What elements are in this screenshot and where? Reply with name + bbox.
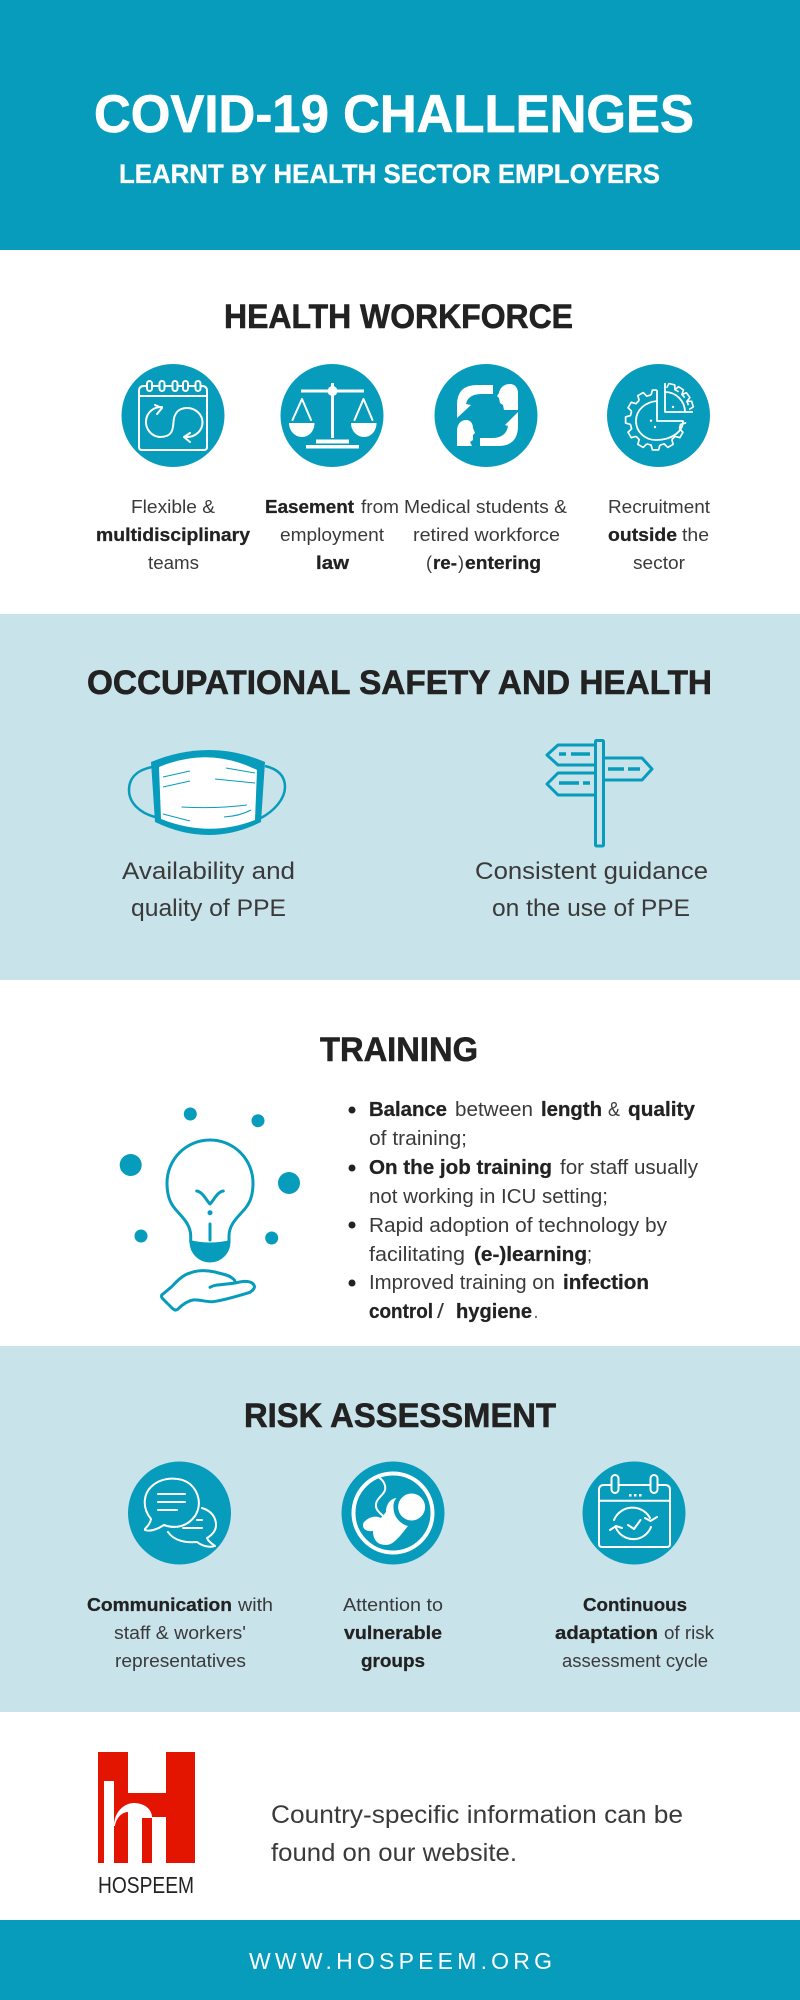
text: training bullet list: between <box>455 1099 533 1121</box>
text: medical students: re- <box>433 553 457 573</box>
text: easement: Easement <box>265 497 354 517</box>
text: training bullet list: not working in ICU setting; <box>369 1186 608 1208</box>
text: continuous adaptation: Continuous <box>583 1595 687 1615</box>
icon: face mask <box>129 750 285 835</box>
text: medical students <box>404 497 567 573</box>
text: recruitment: sector <box>633 553 685 573</box>
subtitle: LEARNT BY HEALTH SECTOR EMPLOYERS <box>119 159 660 189</box>
icon: recruitment gear and protractor <box>607 364 710 467</box>
text: flexible teams: multidisciplinary <box>96 525 250 545</box>
text: training bullet list: Balance <box>369 1099 447 1121</box>
icon: fetus in womb <box>342 1462 444 1564</box>
icon: assessment calendar <box>582 1462 686 1564</box>
text: recruitment: the <box>682 525 709 545</box>
text: medical students: ) <box>458 553 464 573</box>
text: flexible teams: teams <box>148 553 199 573</box>
text: consistent guidance: Consistent guidance <box>475 858 708 885</box>
text: easement: law <box>316 553 350 573</box>
text: training bullet list: & <box>608 1099 621 1121</box>
text: continuous adaptation <box>555 1595 715 1671</box>
text: communication: Communication <box>87 1595 232 1615</box>
panel: health workforce <box>0 250 800 614</box>
logo: HOSPEEM: HOSPEEM <box>98 1872 194 1898</box>
text: easement <box>265 497 399 573</box>
text: training bullet list: Improved training on <box>369 1272 555 1294</box>
text: recruitment <box>608 497 710 573</box>
text: flexible teams <box>96 497 250 573</box>
text: training bullet list: On the job training <box>369 1157 552 1179</box>
text: communication: representatives <box>115 1651 246 1671</box>
logo: HOSPEEM <box>98 1752 195 1898</box>
text: country-specific information: Country-specific information can be <box>271 1801 683 1829</box>
text: vulnerable groups: vulnerable <box>344 1623 442 1643</box>
panel: risk assessment <box>0 1346 800 1712</box>
text: training bullet list: infection <box>563 1272 649 1294</box>
text: training bullet list: ; <box>587 1244 592 1266</box>
text: communication: with <box>237 1595 273 1615</box>
text: continuous adaptation: assessment cycle <box>562 1651 708 1671</box>
text: training bullet list: / <box>437 1301 445 1323</box>
text: training bullet list: for staff usually <box>560 1157 698 1179</box>
heading: health workforce: HEALTH WORKFORCE <box>224 298 573 336</box>
text: training bullet list: hygiene <box>456 1301 532 1323</box>
panel: website note <box>0 1712 800 1920</box>
icon: signpost <box>547 740 652 846</box>
text: recruitment: Recruitment <box>608 497 710 517</box>
text: training bullet list: . <box>534 1301 538 1323</box>
text: medical students: Medical students & <box>404 497 567 517</box>
text: continuous adaptation: adaptation <box>555 1623 658 1643</box>
text: training bullet list <box>348 1099 698 1323</box>
text: availability of PPE: Availability and <box>122 858 295 885</box>
heading: occupational safety and health: OCCUPATIONAL SAFETY AND HEALTH <box>87 664 712 702</box>
icon: light bulb on hand <box>120 1108 300 1310</box>
icon: flexible calendar <box>122 364 224 467</box>
text: training bullet list: facilitating <box>369 1244 465 1266</box>
text: availability of PPE <box>122 858 295 922</box>
text: country-specific information <box>271 1801 683 1867</box>
text: flexible teams: Flexible & <box>131 497 215 517</box>
text: vulnerable groups: Attention to <box>343 1595 443 1615</box>
icon: speech bubbles <box>128 1462 231 1564</box>
text: training bullet list: (e-)learning <box>474 1244 587 1266</box>
text: vulnerable groups <box>343 1595 443 1671</box>
text: easement: from <box>361 497 399 517</box>
panel: footer <box>0 1920 800 2000</box>
icon: scales of justice <box>280 364 384 467</box>
text: training bullet list: length <box>541 1099 602 1121</box>
text: training bullet list: quality <box>628 1099 696 1121</box>
text: medical students: retired workforce <box>413 525 560 545</box>
panel: occupational safety and health <box>0 614 800 980</box>
title: COVID-19 CHALLENGES <box>94 85 694 144</box>
text: website url: WWW.HOSPEEM.ORG <box>249 1948 552 1974</box>
text: availability of PPE: quality of PPE <box>131 895 286 922</box>
text: continuous adaptation: of risk <box>664 1623 715 1643</box>
text: consistent guidance: on the use of PPE <box>492 895 690 922</box>
icon: returning workforce arrows and heads <box>434 364 538 467</box>
text: recruitment: outside <box>608 525 677 545</box>
text: training bullet list: control <box>369 1301 433 1323</box>
panel: header <box>0 0 800 250</box>
panel: training <box>0 980 800 1346</box>
text: training bullet list: of training; <box>369 1128 467 1150</box>
text: training bullet list: Rapid adoption of technology by <box>369 1215 667 1237</box>
text: medical students: ( <box>426 553 432 573</box>
text: consistent guidance <box>475 858 708 922</box>
text: communication <box>87 1595 273 1671</box>
text: country-specific information: found on our website. <box>271 1839 517 1867</box>
text: easement: employment <box>280 525 384 545</box>
heading: risk assessment: RISK ASSESSMENT <box>244 1397 556 1435</box>
text: communication: staff & workers' <box>114 1623 246 1643</box>
text: medical students: entering <box>465 553 541 573</box>
heading: training: TRAINING <box>320 1031 478 1069</box>
text: vulnerable groups: groups <box>361 1651 425 1671</box>
